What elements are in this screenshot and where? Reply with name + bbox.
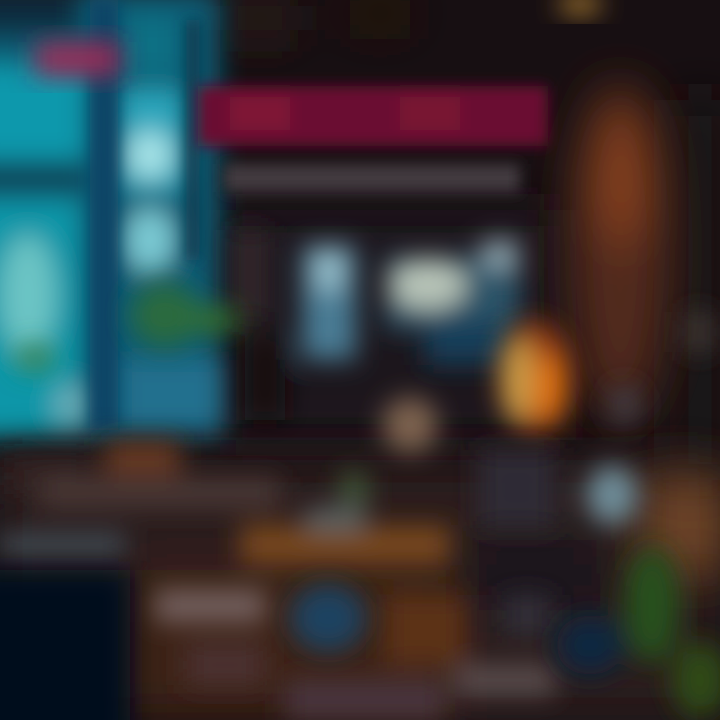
left window: mullion	[90, 0, 200, 430]
wooden column	[570, 80, 670, 420]
left window: teal glass	[0, 0, 225, 440]
background: dark ceiling and walls	[220, 0, 720, 480]
pink sign top left	[35, 42, 120, 76]
plant bottom right	[556, 547, 720, 718]
plants by window	[15, 283, 241, 371]
central window	[232, 230, 520, 420]
blue ball	[290, 584, 366, 652]
ceiling light	[558, 0, 602, 14]
tables and chairs	[0, 312, 714, 720]
crimson banner	[198, 86, 548, 146]
lower dining area	[0, 460, 720, 720]
fireplace flame	[497, 320, 573, 436]
dark navy block bottom left	[0, 570, 130, 720]
grey band	[224, 164, 520, 192]
